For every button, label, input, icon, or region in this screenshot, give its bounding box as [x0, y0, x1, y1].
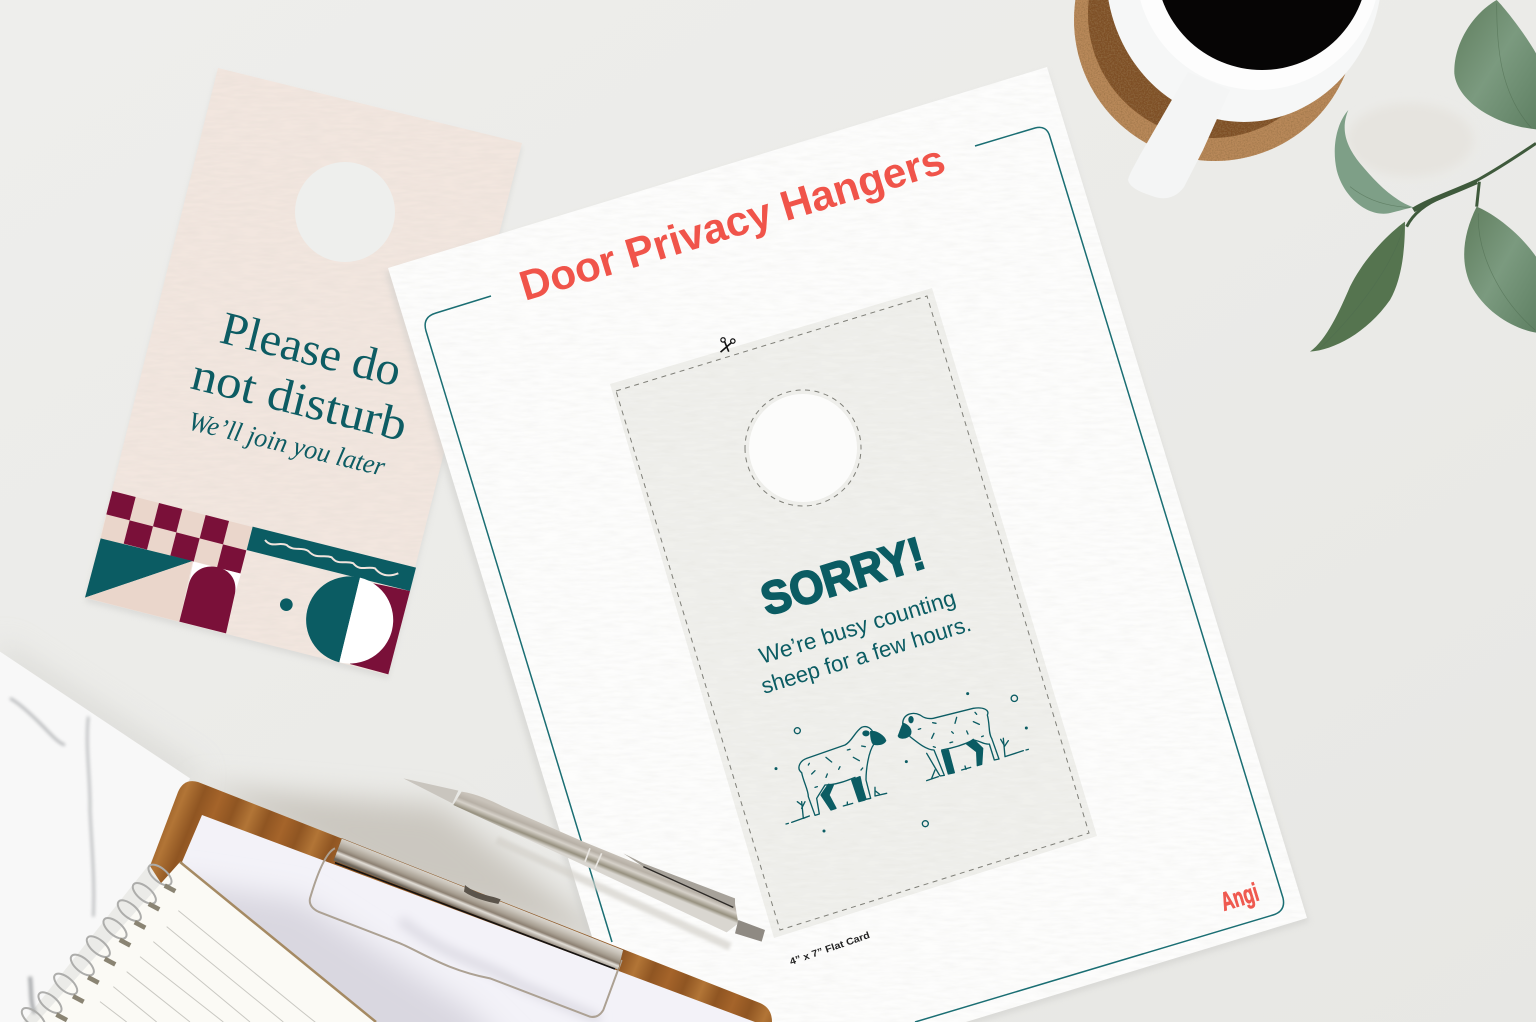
hanger heading: not disturb — [186, 348, 412, 452]
wire handle — [310, 848, 622, 1017]
clip hardware — [310, 838, 623, 1017]
template card — [610, 288, 1097, 938]
right sheep — [898, 708, 999, 776]
marble slab with veins — [0, 652, 190, 1022]
panel: wooden clipboard — [150, 781, 772, 1022]
white paper — [182, 815, 755, 1022]
card body — [85, 68, 522, 675]
title: Door Privacy Hangers — [514, 135, 950, 310]
coffee — [1156, 0, 1368, 70]
wood board — [150, 781, 772, 1022]
stem — [1407, 143, 1536, 227]
panel: spiral notebook — [18, 861, 376, 1022]
panel: cut-out hanger template — [610, 288, 1097, 938]
icon: silver pen — [403, 778, 765, 947]
dashed cut line — [616, 296, 1089, 930]
leaves — [1454, 0, 1536, 129]
tip — [403, 778, 458, 803]
hanger heading: Please do — [215, 302, 406, 397]
barrel rings — [585, 848, 602, 868]
grass tufts — [786, 738, 1028, 824]
leaf veins — [1320, 3, 1535, 348]
logo: Angi: Angi — [1217, 877, 1262, 917]
leaf shadow — [1347, 103, 1473, 177]
paper shading — [170, 880, 600, 1022]
sheet body — [388, 67, 1307, 1022]
notebook page — [37, 862, 376, 1022]
hole — [749, 394, 857, 502]
desk shadow near clipboard — [195, 785, 625, 950]
coaster — [1074, 0, 1356, 161]
pocket clip — [623, 853, 735, 907]
hanger message: We’re busy counting — [756, 585, 959, 669]
cup body — [1106, 0, 1382, 122]
panel: marble surface — [0, 640, 200, 1022]
clip bar — [333, 838, 623, 970]
decorative circles — [794, 728, 800, 734]
size caption: 4” x 7” Flat Card — [788, 930, 872, 968]
card shadow — [85, 72, 522, 679]
black shadow line — [335, 863, 615, 969]
end cap — [735, 920, 765, 942]
page edge — [180, 862, 376, 1022]
geometric pattern — [85, 491, 416, 674]
icon: scissors — [717, 335, 738, 354]
illustration: two sheep — [774, 692, 1028, 832]
sheet shadow — [385, 71, 1309, 1022]
cup rim — [1136, 0, 1380, 90]
hanger heading — [186, 302, 412, 482]
handle — [1128, 72, 1230, 198]
marble shadow — [0, 640, 200, 800]
clip latch — [464, 885, 501, 904]
panel: green plant — [1310, 0, 1536, 352]
panel: pink door hanger — [85, 68, 522, 679]
hanger message: SORRY! — [755, 527, 931, 626]
hole — [295, 162, 395, 262]
panel: coffee cup on cork coaster — [1074, 0, 1382, 198]
coaster recess — [1088, 0, 1336, 138]
hanger message — [755, 527, 974, 699]
hanger message: sheep for a few hours. — [758, 611, 974, 699]
ruled lines and spiral — [18, 861, 333, 1022]
left sheep — [799, 727, 886, 815]
teal frame line — [425, 127, 1284, 1022]
panel: white printable sheet — [385, 67, 1309, 1022]
hanger heading: We’ll join you later — [186, 406, 388, 482]
barrel — [453, 792, 738, 932]
pen shadow — [497, 840, 730, 947]
